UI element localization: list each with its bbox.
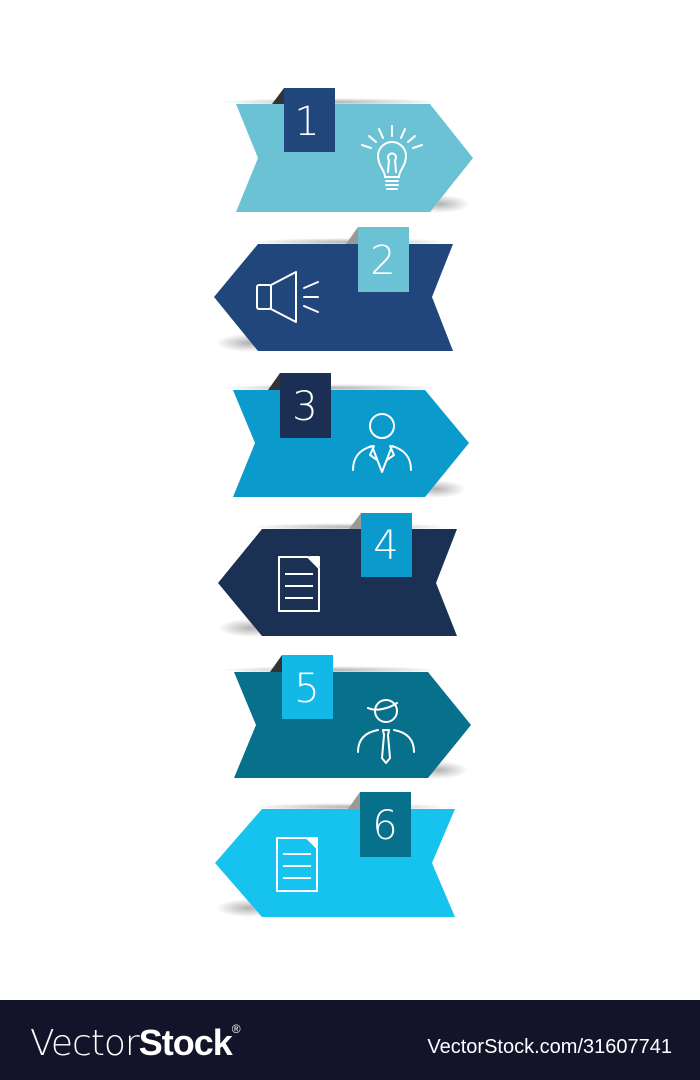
- badge 3: [280, 373, 331, 438]
- icon: speaker: [257, 272, 318, 322]
- badge 6: 6: [372, 803, 398, 849]
- badge 1: 1: [294, 99, 320, 145]
- badge 4: [361, 513, 412, 577]
- icon: businessman: [353, 414, 411, 472]
- icon: document: [279, 557, 319, 611]
- badge 6: [360, 792, 411, 857]
- icon: document: [277, 838, 317, 891]
- step 2 arrow: [214, 227, 453, 352]
- badge 5: [282, 655, 333, 719]
- icon: light bulb: [362, 126, 422, 189]
- badge 2: 2: [370, 238, 396, 284]
- step 6 arrow: [215, 792, 455, 917]
- step 3 arrow: [220, 373, 469, 498]
- badge 2: [358, 227, 409, 292]
- step 1 arrow: [220, 88, 473, 213]
- logo text: VectorStock: [30, 1022, 232, 1064]
- url text: VectorStock.com/31607741: [427, 1036, 672, 1058]
- badge 1: [284, 88, 335, 152]
- logo text: ®: [232, 1022, 241, 1036]
- badge 4: 4: [373, 523, 399, 569]
- footer banner: [0, 1000, 700, 1080]
- badge 3: 3: [292, 384, 318, 430]
- badge 5: 5: [294, 666, 320, 712]
- step 4 arrow: [218, 513, 457, 637]
- icon: person with tie: [358, 700, 414, 763]
- step 5 arrow: [220, 655, 471, 779]
